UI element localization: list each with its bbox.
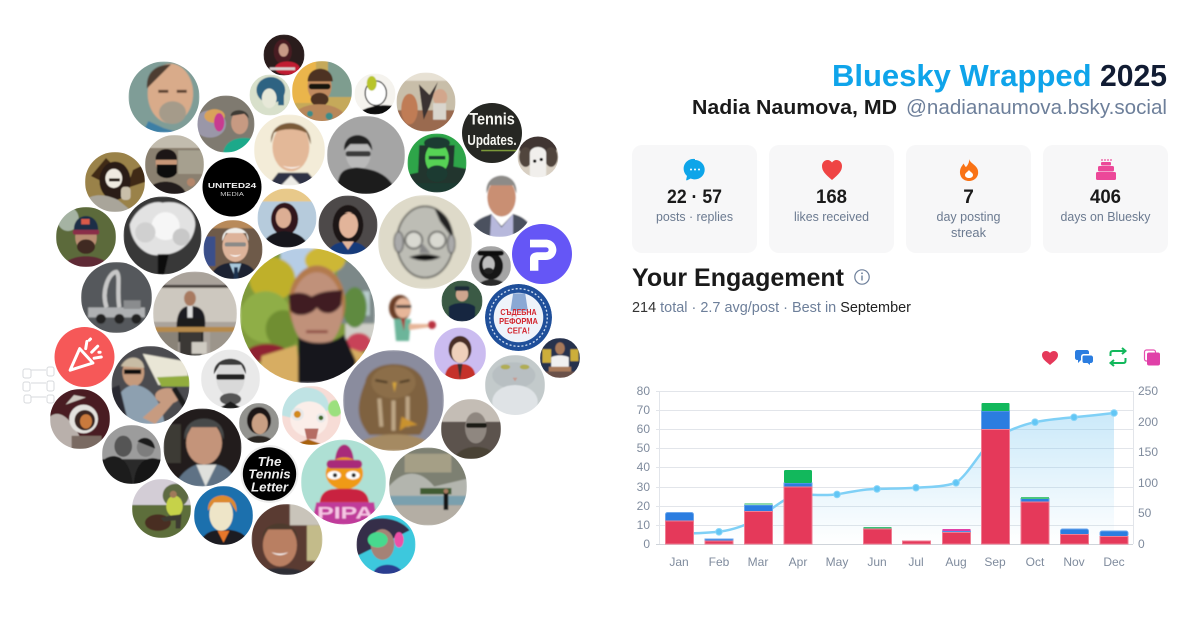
right axis labels: 50 (1138, 506, 1152, 520)
stat value: 7 (963, 187, 974, 208)
icon: heart legend (1042, 351, 1058, 365)
avatar: black and white couple (102, 425, 161, 484)
avatar: Tennis Updates logo (462, 103, 522, 163)
bars: replies (666, 411, 1128, 542)
avatar: teal cartoon character (301, 440, 386, 524)
avatar: Bernie Sanders style portrait (204, 220, 262, 279)
cumulative line (679, 413, 1114, 534)
avatar: woman in red on dark background (264, 34, 304, 76)
combo chart: monthly engagement (637, 384, 1158, 569)
avatar: Asian woman portrait (318, 196, 378, 254)
avatar: bald man (128, 62, 200, 132)
avatar: man in dark coat and cap (442, 280, 482, 322)
avatar: nurse bitmoji without background (389, 295, 436, 341)
avatar: man with black mask in workshop (145, 135, 204, 194)
right axis labels: 150 (1138, 445, 1158, 459)
avatar: long-haired man black and white (471, 246, 511, 286)
avatar: woman with curly hair at snowy landscape (258, 188, 316, 248)
avatar: white rose (124, 196, 202, 274)
avatar: green duotone man (408, 134, 466, 192)
month labels: Dec (1103, 555, 1125, 569)
avatar: sketch of man with sunglasses (201, 350, 260, 408)
avatar: blue seal: РЕФОРМА (499, 317, 538, 326)
avatar: blue seal: СЕГА! (507, 327, 530, 336)
avatar: man with sunglasses at sunset (292, 61, 352, 121)
left axis labels: 30 (637, 480, 650, 494)
right axis labels: 0 (1138, 537, 1145, 551)
month labels (669, 555, 1125, 569)
icon: quotes legend (1144, 350, 1160, 366)
left axis labels: 40 (637, 460, 650, 474)
icon: replies legend (1075, 350, 1093, 365)
month labels: Sep (984, 555, 1006, 569)
avatar: black and white portrait with glasses (327, 116, 405, 194)
avatar: memoji on lilac circle (434, 328, 486, 380)
avatar: Tennis Updates logo: Tennis (469, 111, 515, 129)
title year: 2025 (1100, 58, 1167, 93)
avatar: bearded man with cap (56, 207, 116, 267)
avatar: blond man in suit (254, 114, 325, 186)
month labels: Jul (908, 555, 924, 569)
chart gridlines (656, 391, 1134, 544)
avatar: green-topped sketch head (354, 74, 396, 114)
stat value: 406 (1090, 187, 1121, 208)
avatar: The Tennis Letter logo: Letter (251, 479, 289, 494)
avatar: fishing photo (396, 72, 456, 132)
cumulative area (679, 413, 1114, 544)
avatar: Gandhi engraving (378, 195, 472, 289)
avatar: blue hair illustration (250, 74, 290, 116)
avatar: The Tennis Letter logo: The (258, 454, 282, 469)
avatar: man speaking at a podium (153, 272, 237, 357)
avatar: UNITED24 MEDIA logo: UNITED24 (208, 181, 257, 190)
month labels: Nov (1063, 555, 1085, 569)
left axis labels: 50 (637, 441, 650, 455)
icon: chat bubble (684, 159, 705, 180)
left axis labels: 20 (637, 499, 650, 513)
month labels: Jun (867, 555, 887, 569)
icon: heart (822, 160, 842, 180)
card: posts and replies (632, 145, 757, 253)
avatar: purple P logo (512, 224, 572, 284)
stat label second line: streak (951, 225, 986, 240)
avatar: woman at waterfront ruins (389, 448, 467, 526)
avatar: sketched truck (81, 262, 152, 333)
handle: @nadianaumova.bsky.social (906, 97, 1167, 119)
avatar: UNITED24 MEDIA logo: MEDIA (220, 192, 244, 198)
left axis labels: 80 (637, 384, 650, 398)
engagement summary: 214 total · 2.7 avg/post · Best in September (632, 300, 911, 316)
month labels: May (826, 555, 848, 569)
avatar: owl (343, 350, 444, 451)
stat value: 168 (816, 187, 847, 208)
avatar: character with green goggles (356, 515, 416, 574)
avatar cluster (23, 34, 580, 575)
stat label: likes received (794, 209, 869, 224)
avatar: Tennis Updates logo: Updates. (467, 132, 517, 149)
avatar: grey cat (485, 355, 545, 419)
avatar: teal cartoon character: PIPA (317, 505, 374, 523)
avatar: older man in blazer, white background (473, 174, 528, 237)
card: day posting streak (906, 145, 1031, 253)
legend (1042, 348, 1160, 366)
bars: likes (666, 430, 1128, 544)
heading: your engagement: Your Engagement (632, 264, 845, 292)
icon: info (855, 270, 869, 284)
cumulative points (716, 410, 1117, 535)
icon: repost legend (1110, 348, 1126, 366)
avatar: astronaut (50, 389, 110, 449)
icon: cake (1096, 159, 1116, 180)
avatar: blue seal: СЪДЕБНА (500, 308, 537, 317)
avatar: The Tennis Letter logo: Tennis (248, 467, 291, 482)
left axis labels: 70 (637, 403, 650, 417)
title: Bluesky Wrapped (832, 58, 1092, 93)
avatar: white ghost on dog fur (518, 136, 558, 178)
stat label: days on Bluesky (1060, 209, 1151, 224)
avatar: The Tennis Letter logo (240, 445, 298, 503)
month labels: Jan (669, 555, 689, 569)
avatar: man with unicorn balloon in car (194, 96, 254, 152)
right axis labels: 100 (1138, 476, 1158, 490)
bars: quotes (942, 529, 970, 531)
right axis labels (1138, 384, 1158, 551)
stat value: 22 · 57 (667, 187, 722, 208)
avatar: main profile photo, woman with sunglasses (240, 247, 375, 383)
small faint process diagram (23, 367, 54, 403)
avatar: painted blond man (194, 486, 253, 545)
avatar: anime character with white hair (282, 386, 342, 445)
avatar: man in yellow jacket in a field (132, 479, 191, 538)
avatar: blue seal (485, 284, 552, 351)
avatar: man driving with sunglasses (112, 346, 190, 424)
avatar: smiling man in plane (252, 504, 322, 575)
right axis labels: 200 (1138, 415, 1158, 429)
stat label: posts · replies (656, 209, 733, 224)
month labels: Oct (1026, 555, 1045, 569)
avatar: historical portrait (239, 403, 279, 443)
display name: Nadia Naumova, MD (692, 96, 897, 119)
icon: flame (960, 159, 978, 181)
left axis labels: 60 (637, 422, 650, 436)
right axis labels: 250 (1138, 384, 1158, 398)
card: likes received (769, 145, 894, 253)
left axis labels: 10 (637, 518, 650, 532)
avatar: party popper button (54, 327, 114, 387)
stat label: day posting (936, 209, 1000, 224)
card: days on Bluesky (1043, 145, 1168, 253)
avatar: UNITED24 MEDIA logo (202, 158, 262, 216)
month labels: Feb (709, 555, 730, 569)
month labels: Aug (945, 555, 967, 569)
bars: reposts (744, 403, 1049, 530)
left axis labels (637, 384, 650, 551)
avatar: woman with white face paint (85, 152, 145, 212)
month labels: Apr (789, 555, 807, 569)
avatar: man in white polo (540, 338, 580, 378)
left axis labels: 0 (643, 537, 650, 551)
month labels: Mar (748, 555, 768, 569)
avatar: black and white man in sunglasses (441, 399, 501, 459)
avatar: man in grey blazer (164, 408, 242, 486)
